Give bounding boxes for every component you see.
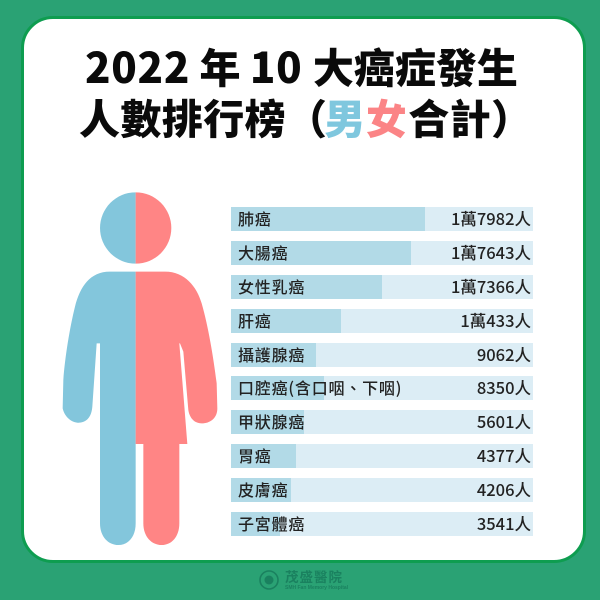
- bar row: skin cancer: 皮膚癌: [238, 477, 288, 501]
- bar row: skin cancer: 4206人: [477, 477, 531, 501]
- bar row: stomach cancer: 胃癌: [238, 443, 272, 467]
- bar row: colorectal cancer: 1萬7643人: [451, 240, 531, 264]
- bar row: prostate cancer: 攝護腺癌: [238, 342, 305, 366]
- bar row: thyroid cancer: 甲狀腺癌: [238, 409, 305, 433]
- bar row: uterine cancer: [231, 512, 533, 536]
- bar row: lung cancer: [231, 207, 533, 231]
- bar row: female breast cancer: 1萬7366人: [451, 274, 531, 298]
- bar row: thyroid cancer: [231, 410, 533, 434]
- bar row: female breast cancer: [231, 275, 533, 299]
- bar row: prostate cancer: [231, 343, 533, 367]
- bar row: stomach cancer: [231, 444, 533, 468]
- icon: logo mark: [259, 570, 279, 590]
- bar row: uterine cancer: 3541人: [477, 511, 531, 535]
- bar row: lung cancer: 1萬7982人: [451, 206, 531, 230]
- bar row: stomach cancer: 4377人: [477, 443, 531, 467]
- bar row: liver cancer: 肝癌: [238, 308, 272, 332]
- title line 1: 2022 年 10 大癌症發生: [85, 35, 518, 96]
- bar row: lung cancer: 肺癌: [238, 206, 272, 230]
- bar row: female breast cancer: 女性乳癌: [238, 274, 305, 298]
- bar row: skin cancer: [231, 478, 533, 502]
- bar row: colorectal cancer: 大腸癌: [238, 240, 288, 264]
- bar row: oral cancer: 口腔癌(含口咽、下咽): [238, 375, 402, 399]
- bar row: liver cancer: [231, 309, 533, 333]
- bar row: oral cancer: 8350人: [477, 375, 531, 399]
- logo: hospital: [259, 566, 348, 591]
- logo english name: SMH Fan Memory Hospital: [285, 585, 348, 591]
- bar row: colorectal cancer: [231, 241, 533, 265]
- bar row: thyroid cancer: 5601人: [477, 409, 531, 433]
- bar row: prostate cancer: 9062人: [477, 342, 531, 366]
- icon: half male half female figure: [62, 192, 218, 545]
- bar row: oral cancer: [231, 376, 533, 400]
- title line 2: 人數排行榜（男女合計）: [79, 86, 532, 146]
- logo name: 茂盛醫院: [285, 566, 343, 586]
- bar row: liver cancer: 1萬433人: [460, 308, 531, 332]
- bar row: uterine cancer: 子宮體癌: [238, 511, 305, 535]
